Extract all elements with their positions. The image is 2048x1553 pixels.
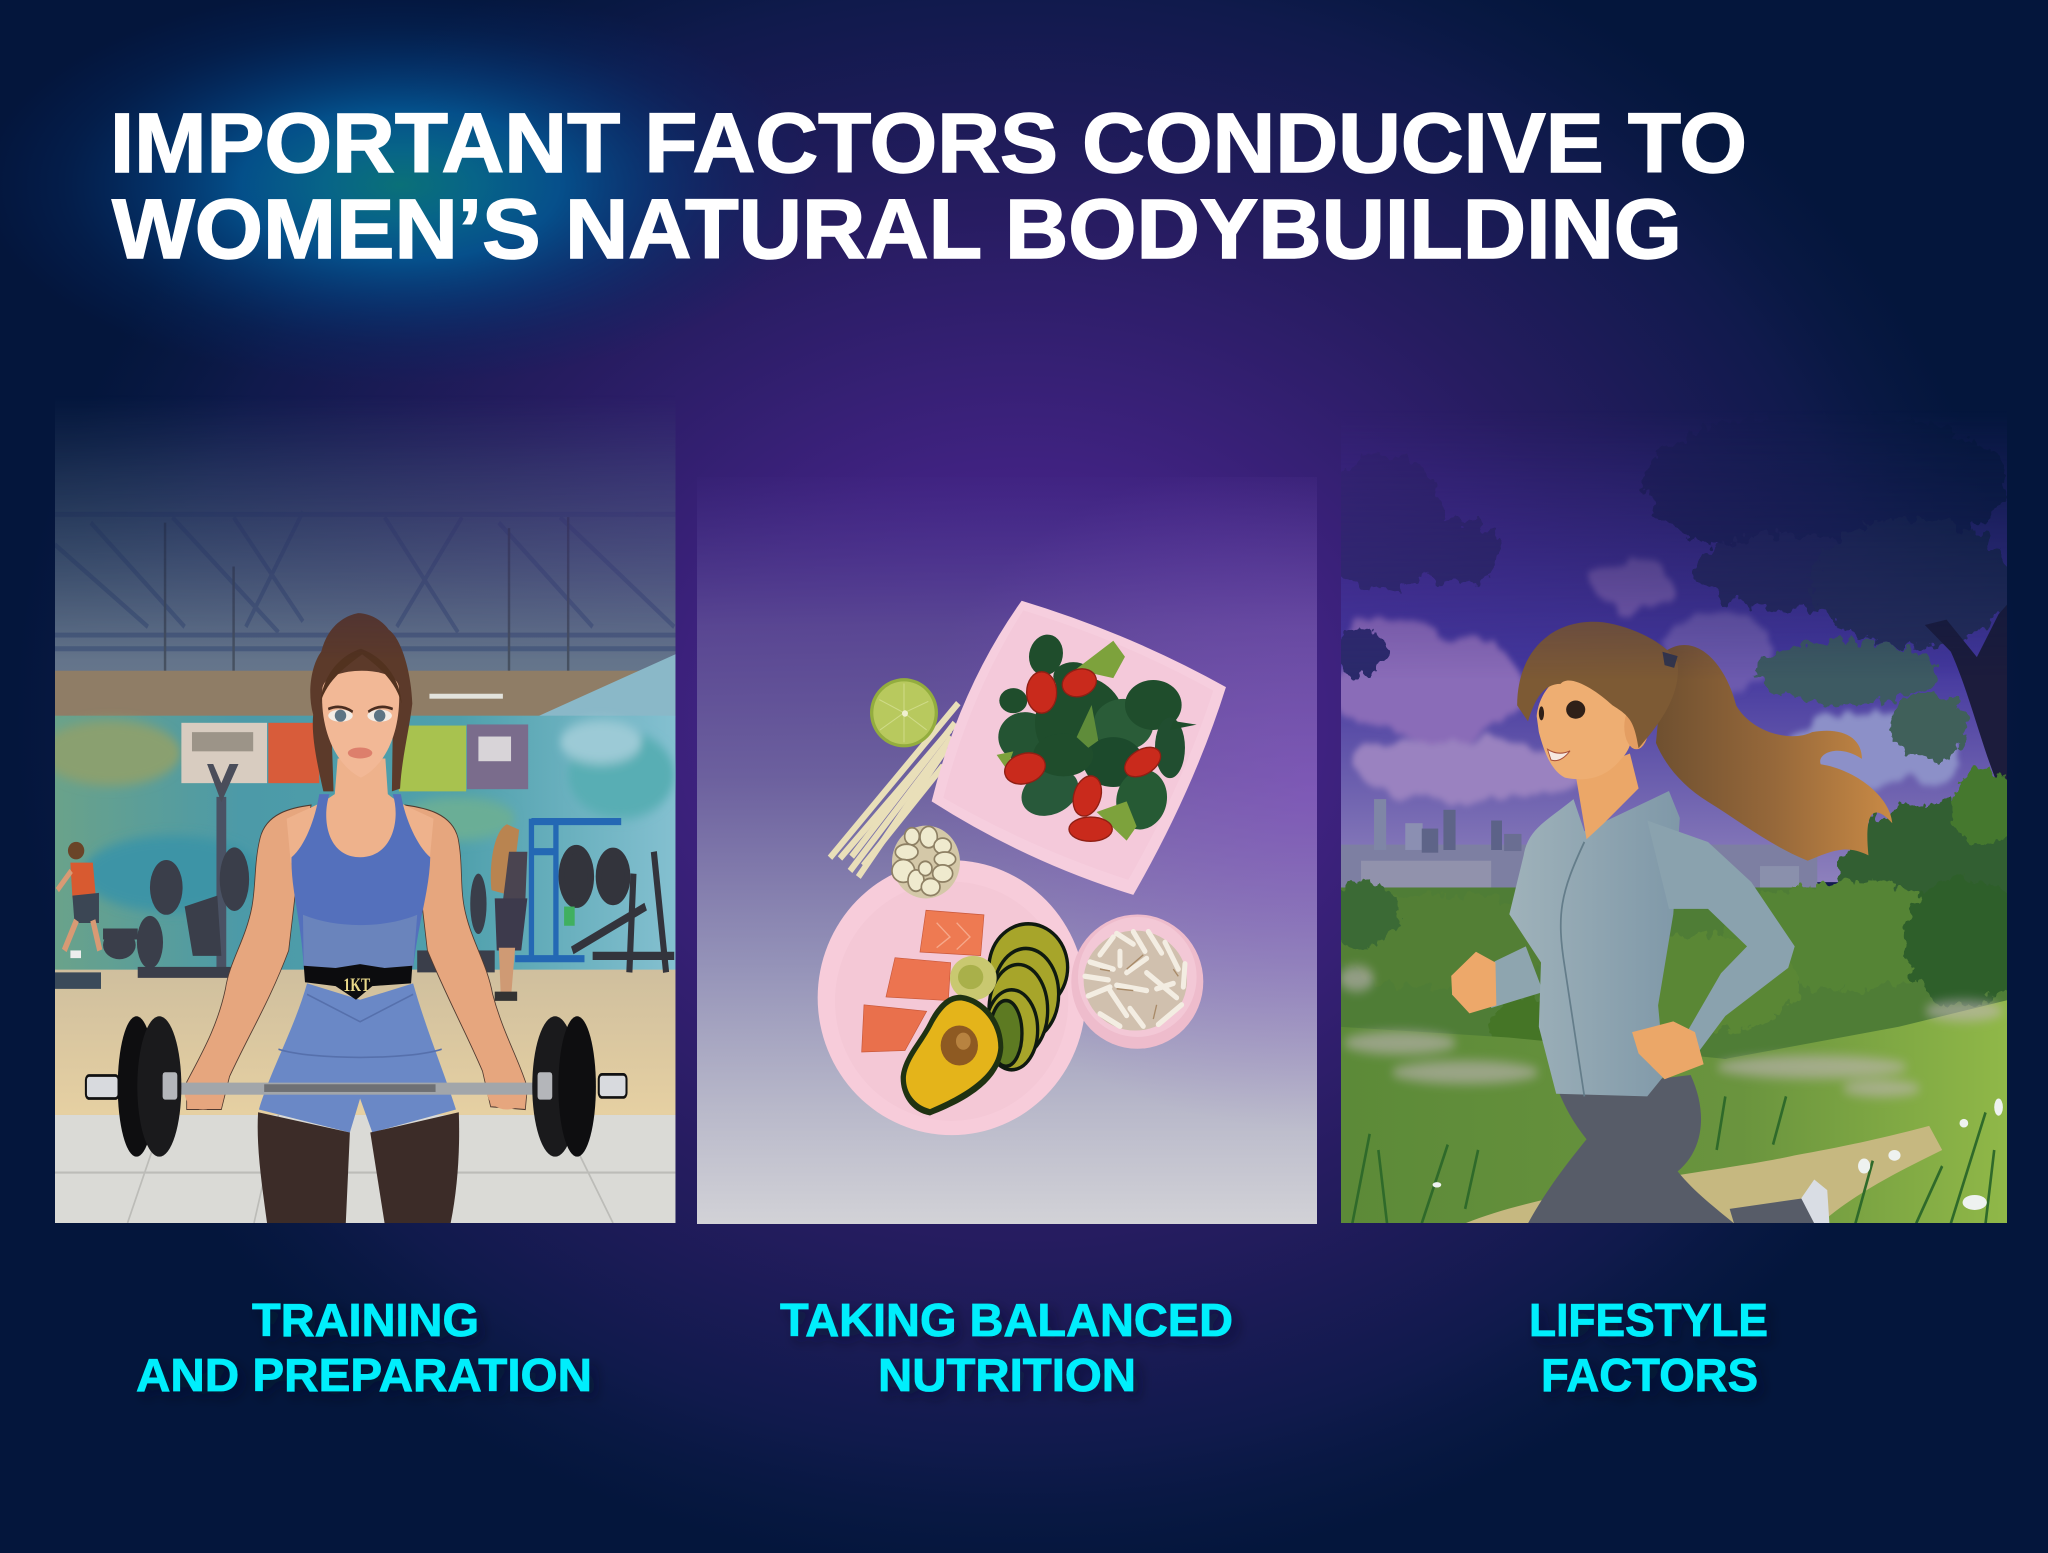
face [322, 671, 399, 778]
hands [184, 1094, 208, 1110]
caption: lifestyle factors [1529, 1294, 1768, 1401]
bowl with almonds [1071, 915, 1203, 1049]
sky and clouds [1335, 400, 2008, 882]
grass meadow and path [1339, 966, 2008, 1223]
distant city skyline [1341, 799, 1818, 888]
caption: training and preparation: AND PREPARATION [136, 1349, 592, 1401]
panel: lifestyle factors illustration [1341, 439, 2007, 1223]
leggings [258, 1112, 350, 1223]
caption: taking balanced nutrition [780, 1294, 1233, 1401]
arms [187, 805, 527, 1110]
belt [304, 964, 412, 1000]
round plate [818, 860, 1086, 1135]
panel: training and preparation illustration [42, 380, 675, 1223]
lifter woman: 1KT [343, 974, 370, 996]
jacket arm [1647, 821, 1795, 1051]
hair back [310, 613, 412, 791]
caption: lifestyle factors: FACTORS [1541, 1349, 1758, 1401]
noodle sticks [830, 703, 958, 877]
trees and bushes [1341, 451, 2007, 1059]
title: IMPORTANT FACTORS CONDUCIVE TO [110, 96, 1747, 190]
title [110, 96, 1747, 276]
neck and chest [287, 758, 434, 874]
pants [1528, 1075, 1734, 1223]
gym equipment [55, 764, 674, 989]
garlic [892, 826, 960, 898]
front hand [1632, 1021, 1704, 1079]
rear arm and hand [1491, 946, 1543, 1008]
avocado half [901, 995, 1003, 1116]
caption: lifestyle factors: LIFESTYLE [1529, 1294, 1768, 1346]
background person: orange shirt [57, 842, 100, 958]
lime [870, 678, 938, 747]
leek slice [950, 956, 997, 1000]
title: WOMEN’S NATURAL BODYBUILDING [112, 182, 1682, 276]
lifter woman [185, 613, 527, 1223]
caption: training and preparation: TRAINING [252, 1294, 479, 1346]
caption: taking balanced nutrition: NUTRITION [878, 1349, 1136, 1401]
runner woman [1451, 622, 1892, 1223]
tank top [291, 794, 430, 968]
gradient backdrop [697, 477, 1317, 1224]
barbell [86, 1016, 627, 1157]
square plate with salad [932, 601, 1226, 895]
caption: training and preparation [136, 1294, 592, 1401]
salmon [862, 910, 984, 1052]
caption: taking balanced nutrition: TAKING BALANCED [780, 1294, 1233, 1346]
panel: balanced nutrition illustration [697, 477, 1317, 1224]
avocado slices [986, 924, 1068, 1070]
jacket torso [1509, 791, 1680, 1096]
shorts [259, 983, 456, 1133]
ponytail [1656, 645, 1892, 861]
gym background [42, 380, 675, 1223]
hair front [1517, 622, 1678, 748]
background person: long-haired woman [491, 824, 527, 1001]
head and neck [1576, 754, 1639, 839]
